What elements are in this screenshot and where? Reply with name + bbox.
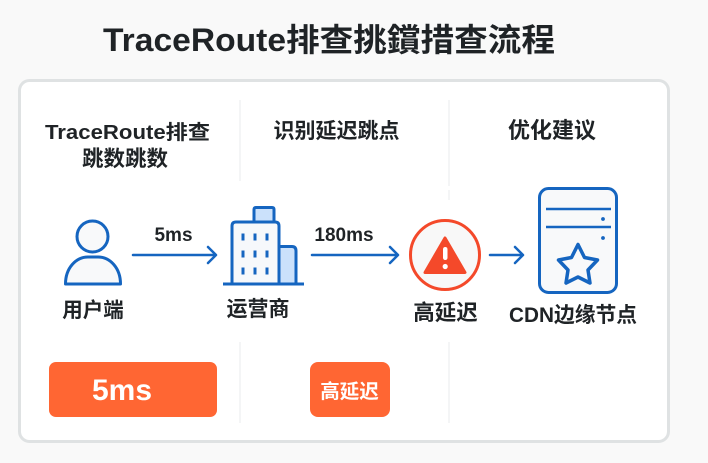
icon: carrier building xyxy=(223,208,304,284)
badge: 5ms: 5ms xyxy=(92,374,152,407)
heading: TraceRoute hop count xyxy=(45,121,210,171)
badge: high latency: 高延迟 xyxy=(320,380,379,403)
icon: high latency warning xyxy=(410,220,480,290)
panel: flow card xyxy=(20,80,668,442)
arrow: high latency to CDN xyxy=(490,247,523,263)
label: carrier: 运营商 xyxy=(226,298,290,321)
badge: 5ms xyxy=(49,362,217,417)
heading: TraceRoute hop count: TraceRoute排查 xyxy=(45,121,210,144)
arrow: user to carrier xyxy=(133,247,216,263)
heading: TraceRoute hop count: 跳数跳数 xyxy=(82,147,168,171)
heading: optimization advice: 优化建议 xyxy=(508,118,596,143)
icon: CDN edge server xyxy=(540,188,616,292)
label: high latency: 高延迟 xyxy=(413,300,478,325)
label: user client: 用户端 xyxy=(62,298,124,322)
label: CDN edge node: CDN边缘节点 xyxy=(509,304,637,327)
title: TraceRoute排查挑鑜措查流程 xyxy=(103,22,555,58)
arrow: carrier to high latency xyxy=(312,247,398,263)
badge: high latency xyxy=(310,362,390,417)
heading: identify latency hops: 识别延迟跳点 xyxy=(274,120,400,143)
label: 5ms: 5ms xyxy=(154,225,193,246)
icon: user xyxy=(66,221,120,284)
label: 180ms: 180ms xyxy=(314,225,374,246)
